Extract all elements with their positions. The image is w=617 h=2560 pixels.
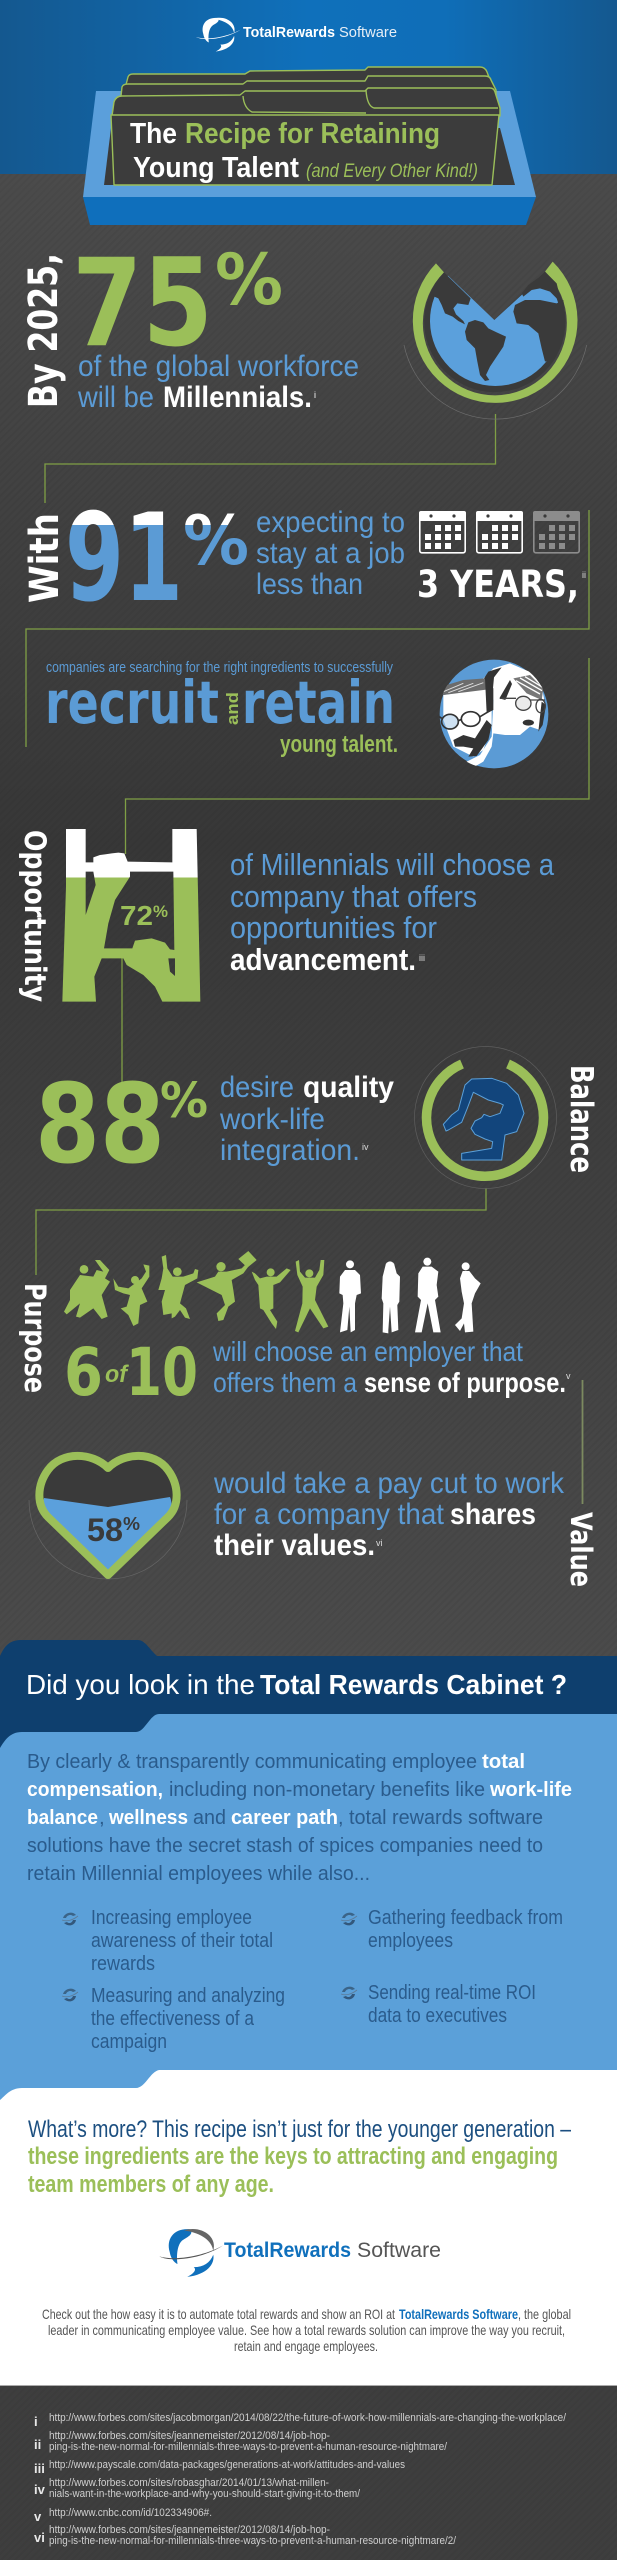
statement: recruit and retain: recruit — [45, 668, 219, 737]
stat: 75% Millennials: of the global workforce — [78, 350, 359, 383]
bullet: measuring: campaign — [91, 2031, 167, 2053]
stat: value 58%: shares — [450, 1498, 536, 1531]
icon: yoga figure in ring — [414, 1046, 556, 1188]
folder tabs — [111, 67, 500, 185]
stat: balance 88%: iv — [362, 1142, 369, 1152]
paragraph: retain Millennial employees while also... — [27, 1862, 370, 1885]
stat: value 58%: vi — [376, 1538, 382, 1548]
stat: purpose 6 of 10: 6 — [64, 1334, 103, 1411]
stat: purpose 6 of 10: sense of purpose. — [364, 1367, 566, 1398]
stat: opportunity 72%: opportunities for — [230, 910, 437, 945]
stat: 75% Millennials: By 2025, — [21, 253, 67, 408]
logo: TotalRewards Software white: TotalRewards — [243, 25, 335, 41]
stat: purpose 6 of 10 — [18, 1251, 571, 1411]
paragraph: career path — [231, 1806, 338, 1829]
paragraph: solutions have the secret stash of spices companies need to — [27, 1834, 543, 1857]
bullet: awareness — [62, 1907, 273, 1975]
white section background — [0, 2060, 617, 2390]
stat: 91% under 3 years: stay at a job — [256, 537, 405, 570]
bullet: feedback: Gathering feedback from — [368, 1907, 563, 1929]
paragraph: and — [193, 1806, 226, 1829]
statement: recruit and retain: retain — [242, 668, 395, 737]
panel: footnotes: http://www.forbes.com/sites/robasghar/2014/01/13/what-millen- — [49, 2477, 329, 2489]
stat: balance 88%: desire — [220, 1071, 294, 1104]
bullet: ROI data: Sending real-time ROI — [368, 1982, 536, 2004]
stat: 75% Millennials: % — [215, 239, 283, 321]
bullet: ROI data — [341, 1982, 536, 2027]
statement: recruit and retain — [45, 659, 398, 758]
stat: opportunity 72%: Opportunity — [18, 830, 52, 1002]
stat: purpose 6 of 10: offers them a — [213, 1367, 357, 1398]
panel: footnotes: v — [34, 2509, 42, 2524]
stat: balance 88%: Balance — [563, 1065, 599, 1173]
stat: opportunity 72%: advancement. — [230, 942, 416, 977]
paragraph: By clearly & transparently communicating employee — [27, 1750, 477, 1773]
title: Recipe for Retaining — [185, 118, 440, 150]
panel: footnotes: ii — [34, 2437, 41, 2452]
bullet: feedback: employees — [368, 1930, 453, 1952]
icon: ladder with hands — [62, 829, 200, 1002]
stat: opportunity 72%: iii — [419, 953, 425, 963]
bullet: measuring: the effectiveness of a — [91, 2008, 255, 2030]
stat: value 58% — [29, 1456, 598, 1587]
stat: 91% under 3 years: less than — [256, 568, 363, 601]
bullet: ROI data: data to executives — [368, 2005, 507, 2027]
paragraph: , total rewards software — [338, 1806, 543, 1829]
stat: 75% Millennials: Millennials. — [163, 381, 312, 414]
paragraph: , — [99, 1806, 105, 1829]
icon: globe — [404, 262, 587, 419]
stat: value 58%: % — [123, 1514, 140, 1534]
panel: footnotes: http://www.payscale.com/data-packages/generations-at-work/attitudes-and-values — [49, 2459, 405, 2471]
title: (and Every Other Kind!) — [306, 161, 478, 182]
logo: TotalRewards Software colour: Software — [357, 2239, 441, 2262]
stat: balance 88%: integration. — [220, 1134, 360, 1167]
stat: 75% Millennials — [21, 233, 359, 414]
stat: opportunity 72%: 72 — [120, 900, 153, 931]
panel: footnotes: iv — [34, 2482, 46, 2497]
panel: footnotes: nials-want-in-the-workplace-and-why-you-should-start-giving-it-to-them/ — [49, 2488, 361, 2500]
paragraph: including non-monetary benefits like — [169, 1778, 485, 1801]
panel: footnotes: iii — [34, 2461, 45, 2476]
stat: opportunity 72% — [18, 829, 555, 1002]
panel: footnotes: http://www.forbes.com/sites/jacobmorgan/2014/08/22/the-future-of-work-how-millennials-are-changing-the-workplace/ — [49, 2412, 567, 2424]
panel: footnotes: vi — [34, 2530, 45, 2545]
header band — [0, 0, 617, 174]
stat: value 58%: their values. — [214, 1529, 375, 1562]
stat: purpose 6 of 10: will choose an employer that — [212, 1336, 523, 1367]
paragraph: wellness — [108, 1806, 188, 1829]
stat: balance 88%: % — [160, 1073, 208, 1129]
tray rim — [83, 91, 536, 197]
paragraph: compensation, — [27, 1778, 163, 1801]
panel: footnotes — [0, 2385, 617, 2560]
stat: value 58%: Value — [564, 1512, 598, 1587]
stat: balance 88%: quality — [303, 1071, 394, 1104]
stat: value 58%: would take a pay cut to work — [213, 1467, 565, 1500]
stat: 91% under 3 years: % — [183, 502, 249, 581]
icon: heart filled to 58% — [29, 1456, 187, 1579]
title: Young Talent — [133, 152, 299, 184]
stat: purpose 6 of 10: v — [566, 1371, 571, 1381]
panel: cabinet heading tab — [0, 1640, 617, 1750]
stat: balance 88%: work-life — [219, 1103, 325, 1136]
icon: three calendars — [419, 511, 580, 553]
panel: footnotes: http://www.forbes.com/sites/jeannemeister/2012/08/14/job-hop- — [49, 2524, 330, 2536]
stat: opportunity 72%: % — [153, 902, 168, 921]
logo: TotalRewards Software colour: TotalRewards — [224, 2239, 351, 2262]
icon: young man and woman faces — [439, 660, 548, 768]
stat: 75% Millennials: 75 — [72, 233, 213, 374]
stat: opportunity 72%: of Millennials will choose a — [230, 847, 555, 882]
panel: footnotes: http://www.forbes.com/sites/jeannemeister/2012/08/14/job-hop- — [49, 2430, 330, 2442]
stat: 91% under 3 years — [22, 488, 586, 629]
stat: value 58%: 58 — [87, 1512, 123, 1548]
stat: opportunity 72%: company that offers — [230, 879, 477, 914]
paragraph: work-life — [489, 1778, 572, 1801]
logo: TotalRewards Software white: Software — [339, 25, 397, 41]
logo: TotalRewards Software white — [196, 18, 397, 51]
file tray with folders — [83, 67, 536, 225]
stat: 75% Millennials: i — [314, 390, 316, 400]
statement: recruit and retain: companies are searching for the right ingredients to successfully — [46, 659, 393, 676]
bullet: measuring — [62, 1985, 285, 2053]
stat: 91% under 3 years: ii — [582, 570, 586, 580]
statement: recruit and retain: and — [223, 692, 242, 725]
icon: six green jumping and four white standing people — [64, 1251, 481, 1333]
panel: footnotes: ping-is-the-new-normal-for-millennials-three-ways-to-prevent-a-human-resource-nightmare/ — [49, 2441, 448, 2453]
panel: footnotes: http://www.cnbc.com/id/102334906#. — [49, 2507, 212, 2519]
tray opening — [104, 128, 515, 185]
panel: cabinet heading tab: Did you look in the — [26, 1669, 255, 1700]
panel: footnotes: i — [34, 2414, 38, 2429]
stat: purpose 6 of 10: of — [105, 1361, 129, 1388]
tray front — [83, 197, 536, 225]
text block: what's more — [28, 2116, 572, 2198]
stat: 91% under 3 years: 91 — [65, 488, 183, 629]
text block: call to action: Check out the how easy it is to automate total rewards and show an ROI at — [42, 2306, 395, 2322]
paragraph — [27, 1750, 572, 1885]
stat: value 58%: for a company that — [214, 1498, 445, 1531]
panel: cabinet heading tab: Total Rewards Cabinet ? — [260, 1669, 567, 1700]
paragraph: total — [482, 1750, 525, 1773]
stat: 91% under 3 years: 3 YEARS, — [417, 563, 579, 606]
panel: total rewards cabinet — [0, 1714, 617, 2100]
stat: balance 88% — [35, 1046, 599, 1188]
bullet: feedback — [341, 1907, 563, 1952]
stat: balance 88%: 88 — [35, 1060, 165, 1188]
stat: 91% under 3 years: With — [22, 513, 68, 603]
stat: purpose 6 of 10: Purpose — [18, 1283, 52, 1393]
stat: purpose 6 of 10: 10 — [126, 1334, 198, 1411]
stat: 91% under 3 years: expecting to — [256, 506, 405, 539]
title: The — [130, 118, 177, 150]
text block: call to action — [42, 2306, 571, 2354]
logo: TotalRewards Software colour — [159, 2229, 441, 2277]
connector lines — [26, 414, 589, 1504]
bullet: awareness: awareness of their total — [91, 1930, 273, 1952]
bullet: awareness: rewards — [91, 1953, 155, 1975]
text block: call to action: retain and engage employees. — [234, 2338, 378, 2354]
stat: 75% Millennials: will be — [77, 381, 154, 414]
bullet: measuring: Measuring and analyzing — [91, 1985, 285, 2007]
text block: what's more: team members of any age. — [28, 2171, 274, 2198]
paragraph: balance — [27, 1806, 98, 1829]
page background — [0, 174, 617, 1674]
panel: footnotes: ping-is-the-new-normal-for-millennials-three-ways-to-prevent-a-human-resource-nightmare/2/ — [49, 2535, 457, 2547]
statement: recruit and retain: young talent. — [280, 731, 398, 758]
text block: call to action: TotalRewards Software — [399, 2306, 518, 2322]
text block: call to action: , the global — [518, 2306, 571, 2322]
bullet: awareness: Increasing employee — [91, 1907, 252, 1929]
title — [130, 118, 478, 184]
